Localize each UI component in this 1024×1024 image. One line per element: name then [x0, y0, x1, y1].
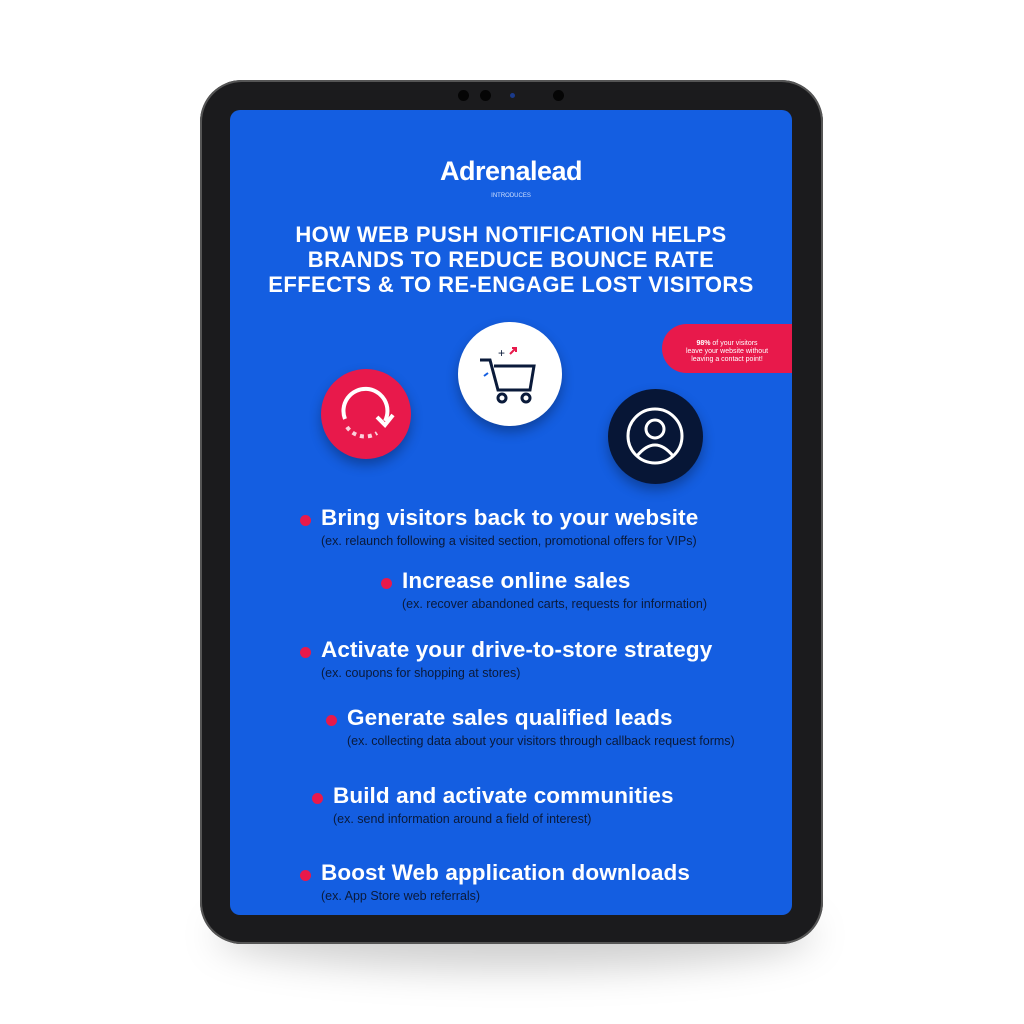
screen [230, 110, 792, 915]
title: HOW WEB PUSH NOTIFICATION HELPS [295, 222, 727, 247]
item 3: Activate your drive-to-store strategy [321, 637, 712, 662]
camera dots [458, 90, 564, 101]
icon: user [608, 389, 703, 484]
title: EFFECTS & TO RE-ENGAGE LOST VISITORS [268, 272, 754, 297]
item 5 [312, 783, 674, 826]
item 2: (ex. recover abandoned carts, requests for information) [402, 597, 707, 611]
item 4: (ex. collecting data about your visitors through callback request forms) [347, 734, 735, 748]
item 2 [381, 568, 707, 611]
item 5: Build and activate communities [333, 783, 674, 808]
item 4 [326, 705, 735, 748]
callout: 98%: leave your website without [686, 348, 768, 355]
icon: cart: + [498, 346, 505, 360]
item 6: Boost Web application downloads [321, 860, 690, 885]
item 6: (ex. App Store web referrals) [321, 889, 480, 903]
introduces: INTRODUCES [491, 193, 531, 199]
item 1: Bring visitors back to your website [321, 505, 698, 530]
title [268, 222, 754, 297]
callout: 98%: 98% of your visitors [696, 340, 758, 347]
callout: 98%: leaving a contact point! [691, 356, 763, 363]
icon: refresh [321, 369, 411, 459]
item 2: Increase online sales [402, 568, 630, 593]
item 1 [300, 505, 698, 548]
tablet shadow [215, 900, 815, 970]
icon: cart [458, 322, 562, 426]
title: BRANDS TO REDUCE BOUNCE RATE [308, 247, 714, 272]
item 5: (ex. send information around a field of interest) [333, 812, 591, 826]
logo: Adrenalead [440, 156, 582, 186]
item 4: Generate sales qualified leads [347, 705, 673, 730]
item 3: (ex. coupons for shopping at stores) [321, 666, 520, 680]
item 1: (ex. relaunch following a visited section, promotional offers for VIPs) [321, 534, 697, 548]
tablet frame [200, 80, 823, 944]
item 6 [300, 860, 690, 903]
item 3 [300, 637, 712, 680]
callout: 98% [662, 324, 802, 373]
